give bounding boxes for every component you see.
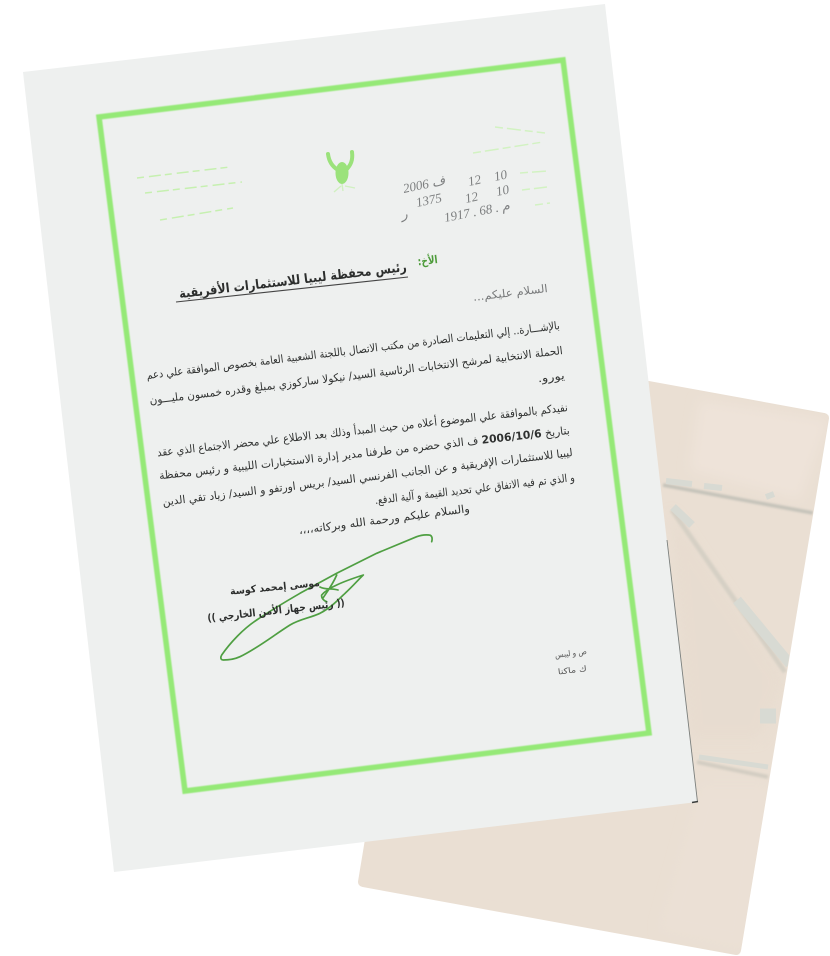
handwritten date and reference numbers: 12 (467, 171, 483, 189)
signature scribble (221, 535, 432, 660)
addressee heading: رئيس محفظة ليبيا للاستثمارات الأفريقية (178, 258, 407, 302)
letter body text: و الذي تم فيه الاتفاق علي تحديد القيمة و آلية الدفع. (374, 470, 575, 507)
addressee label: الأخ: (417, 252, 438, 268)
letter body text: بالإشـــارة.. إلي التعليمات الصادرة من مكتب الاتصال باللجنة الشعبية العامة بخصوص الموافقة علي دعم (146, 319, 560, 382)
letterhead left: faint green lines (137, 167, 242, 220)
signatory name: موسى إمحمد كوسة (230, 578, 320, 598)
handwritten date and reference numbers: 10 (493, 166, 509, 184)
signatory title: (( رئيس جهاز الأمن الخارجي )) (207, 596, 345, 625)
letter body text: بتاريخ 2006/10/6 ف الذي حضره من طرفنا مدير إدارة الاستخبارات الليبية و رئيس محفظة (158, 424, 570, 482)
handwritten date and reference numbers: 12 (464, 188, 480, 206)
greeting: السلام عليكم... (472, 282, 548, 304)
copy note bottom: ك ماكنا (557, 664, 587, 677)
handwritten date and reference numbers (398, 166, 511, 226)
letter body text: يورو. (537, 369, 565, 385)
copy note top: ص و ليبس (554, 647, 588, 660)
handwritten date and reference numbers: 1375 (415, 190, 444, 210)
handwritten date and reference numbers: ف 2006 (402, 172, 447, 196)
letter body text (146, 319, 575, 537)
letter body text: الحملة الانتخابية لمرشح الانتخابات الرئاسية السيد/ نيكولا ساركوزي بمبلغ وقدره خمسون مليـــون (149, 344, 563, 407)
handwritten date and reference numbers: ر (398, 206, 410, 223)
front paper: scanned letter sheet (23, 4, 698, 872)
back paper: creased beige sheet (363, 350, 829, 950)
heading underline (176, 277, 408, 302)
letter body text: ليبيا للاستثمارات الإفريقية و عن الجانب الفرنسي السيد/ بريس اورتفو و السيد/ زياد تقي الدين (162, 446, 573, 509)
handwritten date and reference numbers: 1917 . 68 . م (443, 198, 511, 226)
green page frame (99, 60, 649, 791)
handwritten date and reference numbers: 10 (495, 181, 511, 199)
letter body text: والسلام عليكم ورحمة الله وبركاته،،،، (298, 502, 470, 537)
letter body text: نفيدكم بالموافقة علي الموضوع أعلاه من حيث المبدأ وذلك بعد الاطلاع علي محضر الاجتماع الذي عقد (156, 400, 568, 459)
icon: green emblem (328, 152, 355, 192)
letterhead right: faint green lines (473, 127, 550, 205)
